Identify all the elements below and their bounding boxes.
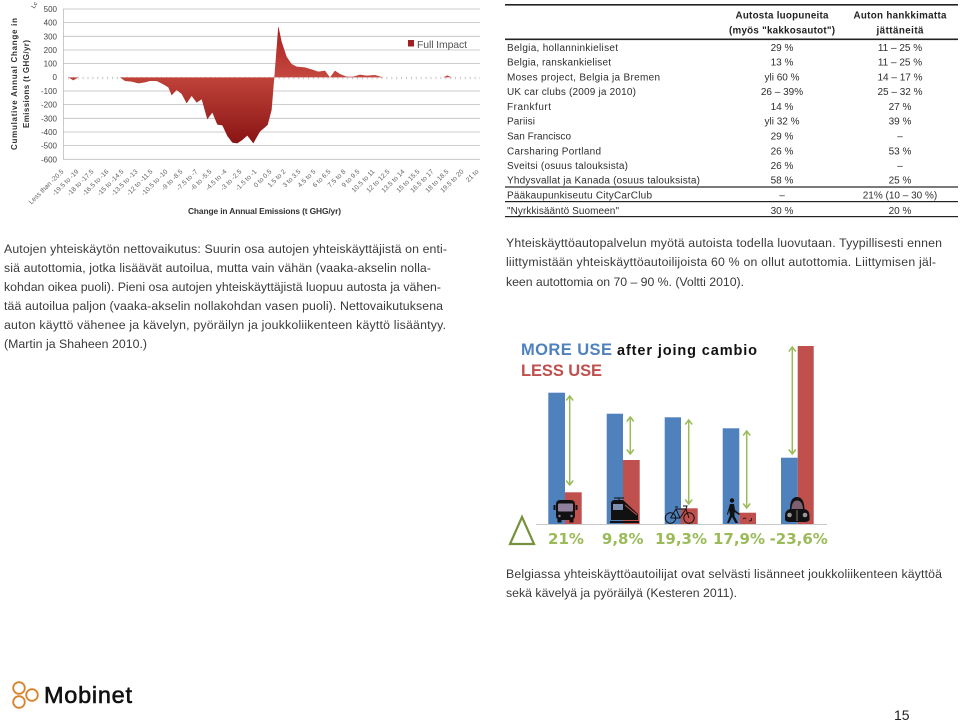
x axis category labels: 3 to 3.5 <box>282 168 303 189</box>
x axis category labels: -12 to -11.5 <box>126 168 155 197</box>
x axis category labels: -1.5 to -1 <box>235 168 259 192</box>
text block: giving up cars <box>506 236 942 289</box>
table rows: yli 60 % <box>764 72 800 83</box>
icon: bicycle <box>665 506 694 523</box>
x axis category labels: -6 to -5.5 <box>190 168 214 192</box>
percentage change values: 17,9% <box>713 530 765 548</box>
table rows: 53 % <box>889 146 912 157</box>
table rows: 26 % <box>771 161 794 172</box>
table rows: Yhdysvallat ja Kanada (osuus talouksista) <box>507 176 700 187</box>
table header <box>729 10 947 36</box>
x axis title: Change in Annual Emissions (t GHG/yr) <box>188 206 341 216</box>
y axis values: -100 <box>41 87 58 96</box>
table rows: Belgia, ranskankieliset <box>507 58 611 69</box>
x axis category labels: 1.5 to 2 <box>267 168 288 189</box>
table header: Auton hankkimatta <box>854 10 947 22</box>
y axis values: -500 <box>41 142 58 151</box>
icon: bus <box>554 500 578 522</box>
text block: giving up cars: Yhteiskäyttöautopalvelun myötä autoista todella luovutaan. Tyypillisesti ennen <box>506 236 942 250</box>
table rows: Pääkaupunkiseutu CityCarClub <box>507 191 652 202</box>
bar chart: more use / less use after joining cambio <box>510 341 828 548</box>
x axis category labels: 6 to 6.5 <box>312 168 333 189</box>
table rows: 25 % <box>889 176 912 187</box>
x axis category labels: -10.5 to -10 <box>140 168 170 198</box>
percentage change values: -23,6% <box>770 530 828 548</box>
y axis title: Cumulative Annual Change in <box>10 18 19 150</box>
table rows: Sveitsi (osuus talouksista) <box>507 161 628 172</box>
text block: giving up cars: liittymistään yhteiskäyttöautoilijoista 60 % on ollut autottomia. Liittymisen jäl- <box>506 255 936 269</box>
table rows: Carsharing Portland <box>507 146 601 157</box>
x axis category labels: 12 to 12.5 <box>365 168 392 194</box>
negative area <box>68 77 274 143</box>
table rows: Moses project, Belgia ja Bremen <box>507 72 660 83</box>
table rows: – <box>897 131 903 142</box>
x axis category labels: -9 to -8.5 <box>161 168 185 192</box>
text block: giving up cars: keen autottomia on 70 – 90 %. (Voltti 2010). <box>506 275 744 289</box>
x axis category labels: 0 to 0.5 <box>253 168 274 189</box>
y axis values: -200 <box>41 101 58 110</box>
y axis title: Emissions (t GHG/yr) <box>22 40 31 128</box>
percentage change values <box>548 530 828 548</box>
x axis category labels: 7.5 to 8 <box>327 168 348 189</box>
table rows: 14 % <box>771 102 794 113</box>
y axis values: 0 <box>53 73 58 82</box>
table rows: 11 – 25 % <box>878 43 922 54</box>
text block: net effect of car sharing: tää autoilua paljon (vaaka-akselin nollakohdan vasen puoli). Nettovaikutuksena <box>4 299 443 313</box>
x axis category labels: -19.5 to -19 <box>51 168 81 198</box>
table rows: 29 % <box>771 43 794 54</box>
table rows: – <box>897 161 903 172</box>
text block: Belgian users: sekä kävelyä ja pyöräilyä (Kesteren 2011). <box>506 586 737 600</box>
table rows: 26 – 39% <box>761 87 803 98</box>
y axis values <box>41 5 58 164</box>
table header: (myös "kakkosautot") <box>729 26 835 36</box>
logo: Mobinet: Mobinet <box>44 682 132 708</box>
positive area <box>274 26 452 77</box>
text block: net effect of car sharing: kohdan oikea puoli). Pieni osa autojen yhteiskäyttäjistä luopuu autosta ja vähen- <box>4 280 441 294</box>
table rows: – <box>779 191 785 202</box>
table header: Autosta luopuneita <box>736 10 829 22</box>
table: car reduction by study <box>505 4 958 217</box>
percentage change values: 19,3% <box>655 530 707 548</box>
icon: train <box>610 498 639 523</box>
text block: net effect of car sharing: siä autottomia, jotka lisäävät autoilua, mutta vain vähän (vaaka-akselin nolla- <box>4 261 431 275</box>
y axis values: 500 <box>44 5 58 14</box>
table rows: 30 % <box>771 206 794 217</box>
table header: jättäneitä <box>876 26 924 36</box>
x axis category labels: 4.5 to 5 <box>297 168 318 189</box>
y axis values: 200 <box>44 46 58 55</box>
x axis category labels: -7.5 to -7 <box>176 168 200 192</box>
legend: full impact: Full Impact <box>417 39 467 51</box>
table rows <box>507 43 937 217</box>
percentage change values: 9,8% <box>602 530 644 548</box>
table rows: 27 % <box>889 102 912 113</box>
table rows: San Francisco <box>507 131 571 142</box>
y axis title: Lc <box>31 1 39 10</box>
table rows: 13 % <box>771 58 794 69</box>
x axis category labels: -15 to -14.5 <box>96 168 126 198</box>
y axis values: 100 <box>44 60 58 69</box>
table rows: yli 32 % <box>764 117 800 128</box>
x axis category labels: -13.5 to -13 <box>110 168 140 198</box>
table rows: 14 – 17 % <box>877 72 923 83</box>
x axis category labels: 16.5 to 17 <box>409 168 436 194</box>
x axis category labels: -16.5 to -16 <box>81 168 111 198</box>
x axis category labels: Less than -20.5 <box>28 168 66 206</box>
y axis values: 400 <box>44 19 58 28</box>
table rows: "Nyrkkisääntö Suomeen" <box>507 206 619 217</box>
icon: pedestrian <box>727 498 752 523</box>
table rows: Pariisi <box>507 117 535 128</box>
x axis category labels: 13.5 to 14 <box>380 168 407 194</box>
table rows: Belgia, hollanninkieliset <box>507 43 618 54</box>
y axis values: -300 <box>41 114 58 123</box>
y axis values: -600 <box>41 155 58 164</box>
bars <box>536 346 827 525</box>
table rows: 25 – 32 % <box>877 87 923 98</box>
x axis category labels: -4.5 to -4 <box>205 168 229 192</box>
percentage change values: 21% <box>548 530 584 548</box>
text block: Belgian users: Belgiassa yhteiskäyttöautoilijat ovat selvästi lisänneet joukkoliikenteen käyttöä <box>506 567 942 581</box>
text block: net effect of car sharing <box>4 242 447 351</box>
table rows: UK car clubs (2009 ja 2010) <box>507 87 636 98</box>
x axis category labels: -18 to -17.5 <box>66 168 96 198</box>
table rows: 20 % <box>889 206 912 217</box>
text block: net effect of car sharing: (Martin ja Shaheen 2010.) <box>4 337 147 351</box>
icon: delta symbol <box>510 517 534 544</box>
x axis category labels: -3 to -2.5 <box>220 168 244 192</box>
area chart: cumulative change in emissions <box>10 1 481 216</box>
chart heading: after joing cambio <box>617 343 757 359</box>
table rows: 21% (10 – 30 %) <box>863 191 937 202</box>
table rows: 39 % <box>889 117 912 128</box>
table rows: 29 % <box>771 131 794 142</box>
y axis values: 300 <box>44 32 58 41</box>
x axis category labels: 15 to 15.5 <box>395 168 422 194</box>
x axis category labels: 18 to 18.5 <box>424 168 451 194</box>
x axis category labels: 19.5 to 20 <box>439 168 466 194</box>
x axis category labels: 21 to <box>465 168 481 184</box>
x axis category labels: 10.5 to 11 <box>351 168 377 194</box>
table rows: 26 % <box>771 146 794 157</box>
y axis values: -400 <box>41 128 58 137</box>
chart heading <box>521 341 757 380</box>
difference arrows <box>566 347 796 508</box>
y axis title <box>10 1 39 150</box>
text block: Belgian users <box>506 567 942 600</box>
table rows: 58 % <box>771 176 794 187</box>
chart heading: LESS USE <box>521 362 602 380</box>
x axis category labels: 9 to 9.5 <box>341 168 362 189</box>
x axis category labels <box>28 168 481 206</box>
table rows: 11 – 25 % <box>878 58 922 69</box>
text block: net effect of car sharing: auton käyttö vähenee ja kävelyn, pyöräilyn ja joukkoliikenteen käyttö lisääntyy. <box>4 318 446 332</box>
text block: net effect of car sharing: Autojen yhteiskäytön nettovaikutus: Suurin osa autojen yhteiskäyttäjistä on enti- <box>4 242 447 256</box>
icon: car <box>785 497 810 522</box>
table rows: Frankfurt <box>507 102 551 113</box>
chart heading: MORE USE <box>521 341 612 359</box>
